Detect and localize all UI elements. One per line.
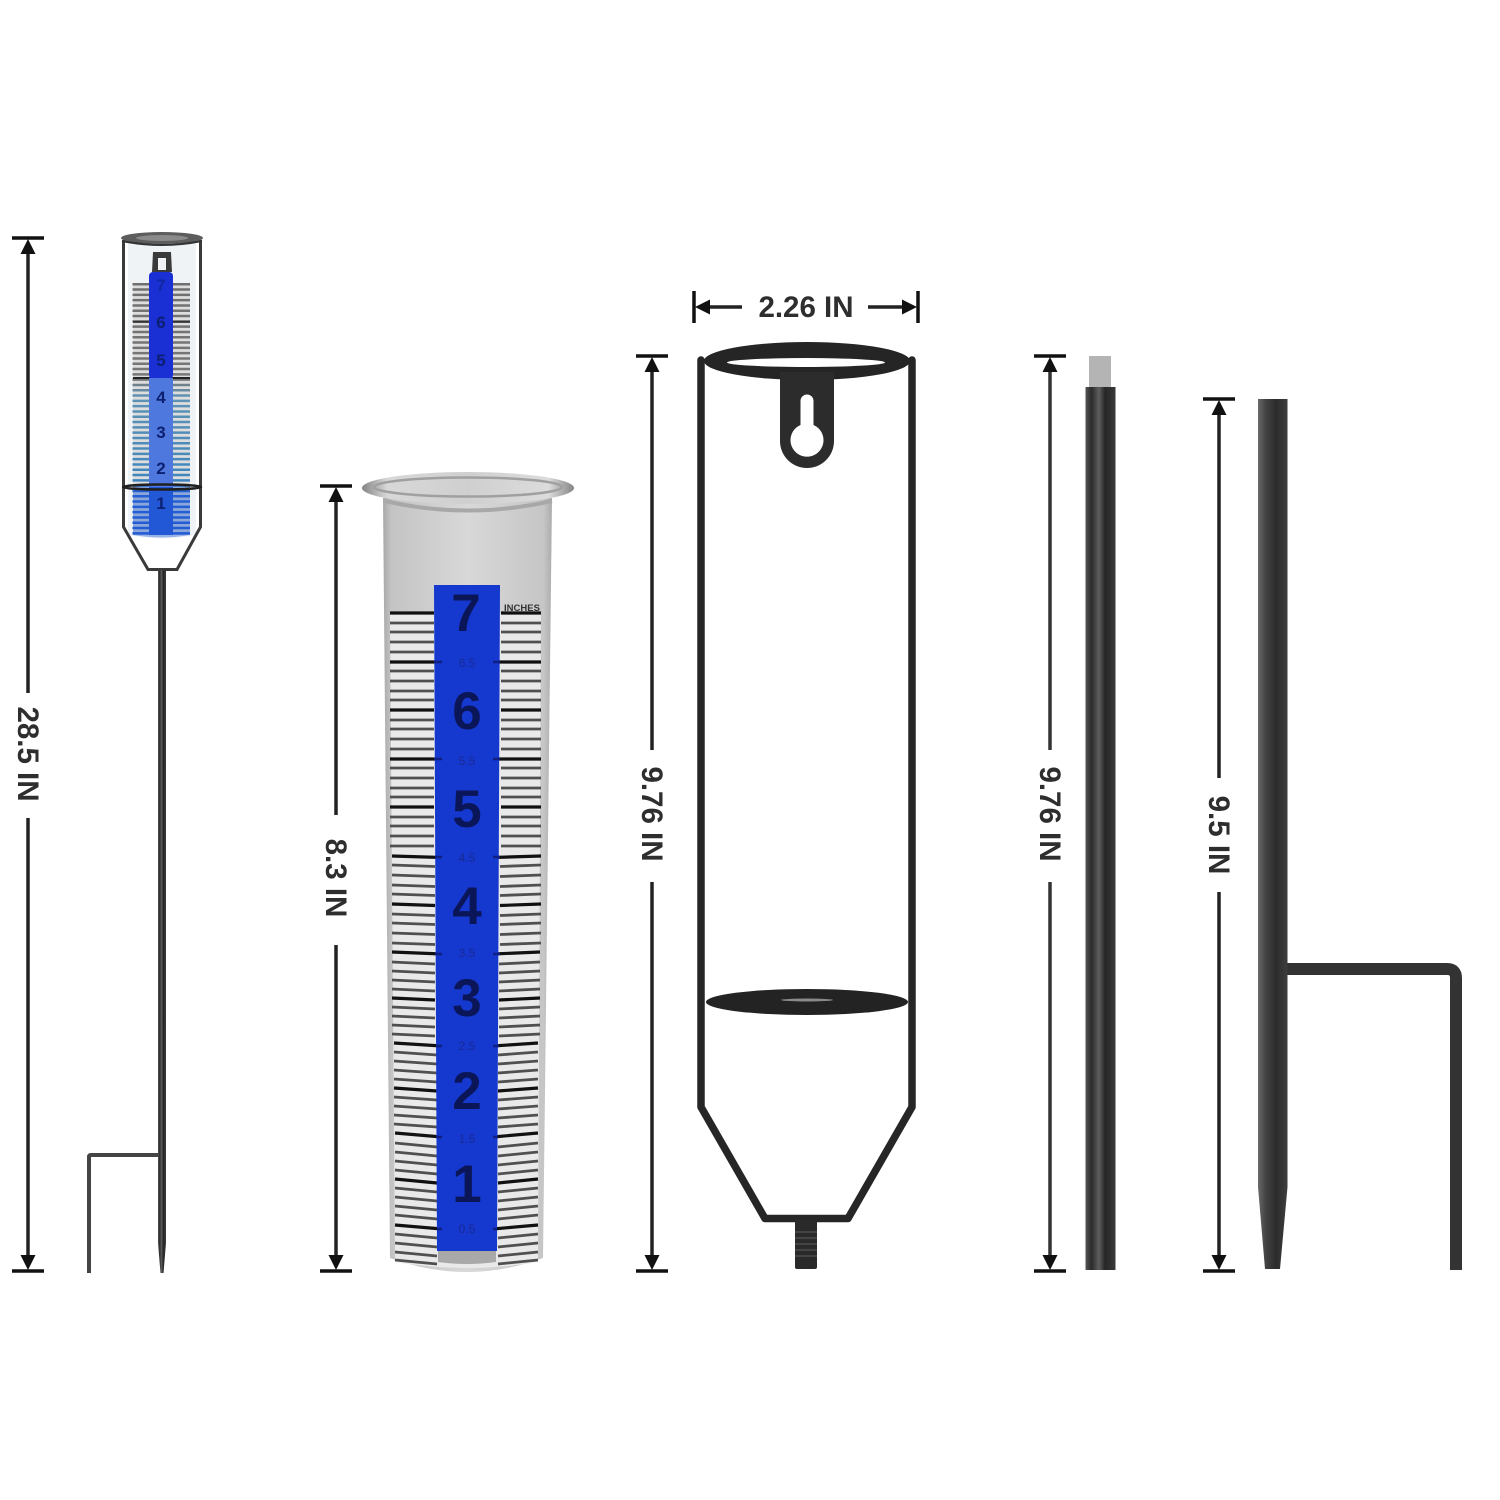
tube blue scale: 4.5 [459,851,476,865]
mini gauge glass tube [128,240,196,538]
stake shaft [158,570,166,1273]
mini gauge blue scale: 3 [156,423,166,442]
dimension: 9.5 IN stake height: 9.5 IN [1202,796,1235,874]
mini gauge blue scale: 7 [156,276,166,295]
assembled rain gauge on stake [89,232,203,1273]
tube body [383,498,552,1272]
holder frame [701,360,912,1218]
mini gauge blue scale: 2 [156,459,166,478]
holder lower ring [706,989,908,1015]
mini gauge blue scale [133,272,190,538]
stake leg and arm [1286,969,1456,1270]
dimension: 9.76 IN rod height [1033,356,1066,1271]
stake spike [1258,399,1288,1269]
mini gauge blue scale: 1 [156,494,166,513]
tube blue scale: 5 [452,780,482,839]
tube blue scale: 0.5 [459,1222,476,1236]
tube INCHES caption: INCHES [504,603,540,614]
tube blue scale: 3.5 [459,946,476,960]
mini gauge blue scale: 6 [156,313,166,332]
mini gauge blue scale: 5 [156,351,166,370]
tube blue scale [434,584,500,1251]
mini gauge hanging tab [152,252,172,272]
dimension: 9.76 IN holder height: 9.76 IN [635,766,668,862]
wire holder [701,342,912,1269]
rod threaded tip [1089,356,1111,388]
ground stake with leg [1258,399,1456,1270]
threaded extension rod [1086,356,1116,1270]
tube tick background [390,613,541,1268]
dimension: 9.76 IN rod height: 9.76 IN [1033,766,1066,862]
tube base band [438,1250,496,1264]
tube blue scale: 4 [452,877,482,936]
dimension: 9.76 IN holder height [635,356,668,1271]
tube blue scale: 2.5 [459,1039,476,1053]
dimension: 8.3 IN tube height [319,486,352,1271]
mini gauge lower ring [123,484,201,490]
tube blue scale: 7 [451,584,481,643]
dimension: 2.26 IN holder width [694,291,918,324]
stake leg [89,1155,158,1273]
tube blue scale: 5.5 [459,754,476,768]
tube blue scale: 3 [452,969,482,1028]
dimension: 8.3 IN tube height: 8.3 IN [319,839,352,917]
mini gauge wire frame [124,240,200,570]
tube rim [362,472,574,510]
holder top ring [704,342,910,380]
tube blue scale: 6 [452,682,482,741]
tube minor ticks [390,623,541,1264]
measuring tube [362,472,574,1272]
dimension: 9.5 IN stake height [1202,399,1235,1271]
tube major ticks [390,613,541,1229]
mini gauge rim [121,232,203,245]
tube blue scale: 1.5 [459,1132,476,1146]
dimension: 2.26 IN holder width: 2.26 IN [758,291,854,324]
mini gauge blue scale: 4 [156,388,166,407]
dimension: 28.5 IN overall height [11,238,44,1271]
holder keyhole bracket [780,372,834,468]
tube blue scale: 6.5 [459,656,476,670]
rod body [1086,387,1116,1270]
dimension: 28.5 IN overall height: 28.5 IN [11,706,44,802]
tube blue scale: 1 [452,1155,482,1214]
tube blue scale: 2 [452,1062,482,1121]
holder threaded bolt [795,1220,817,1269]
